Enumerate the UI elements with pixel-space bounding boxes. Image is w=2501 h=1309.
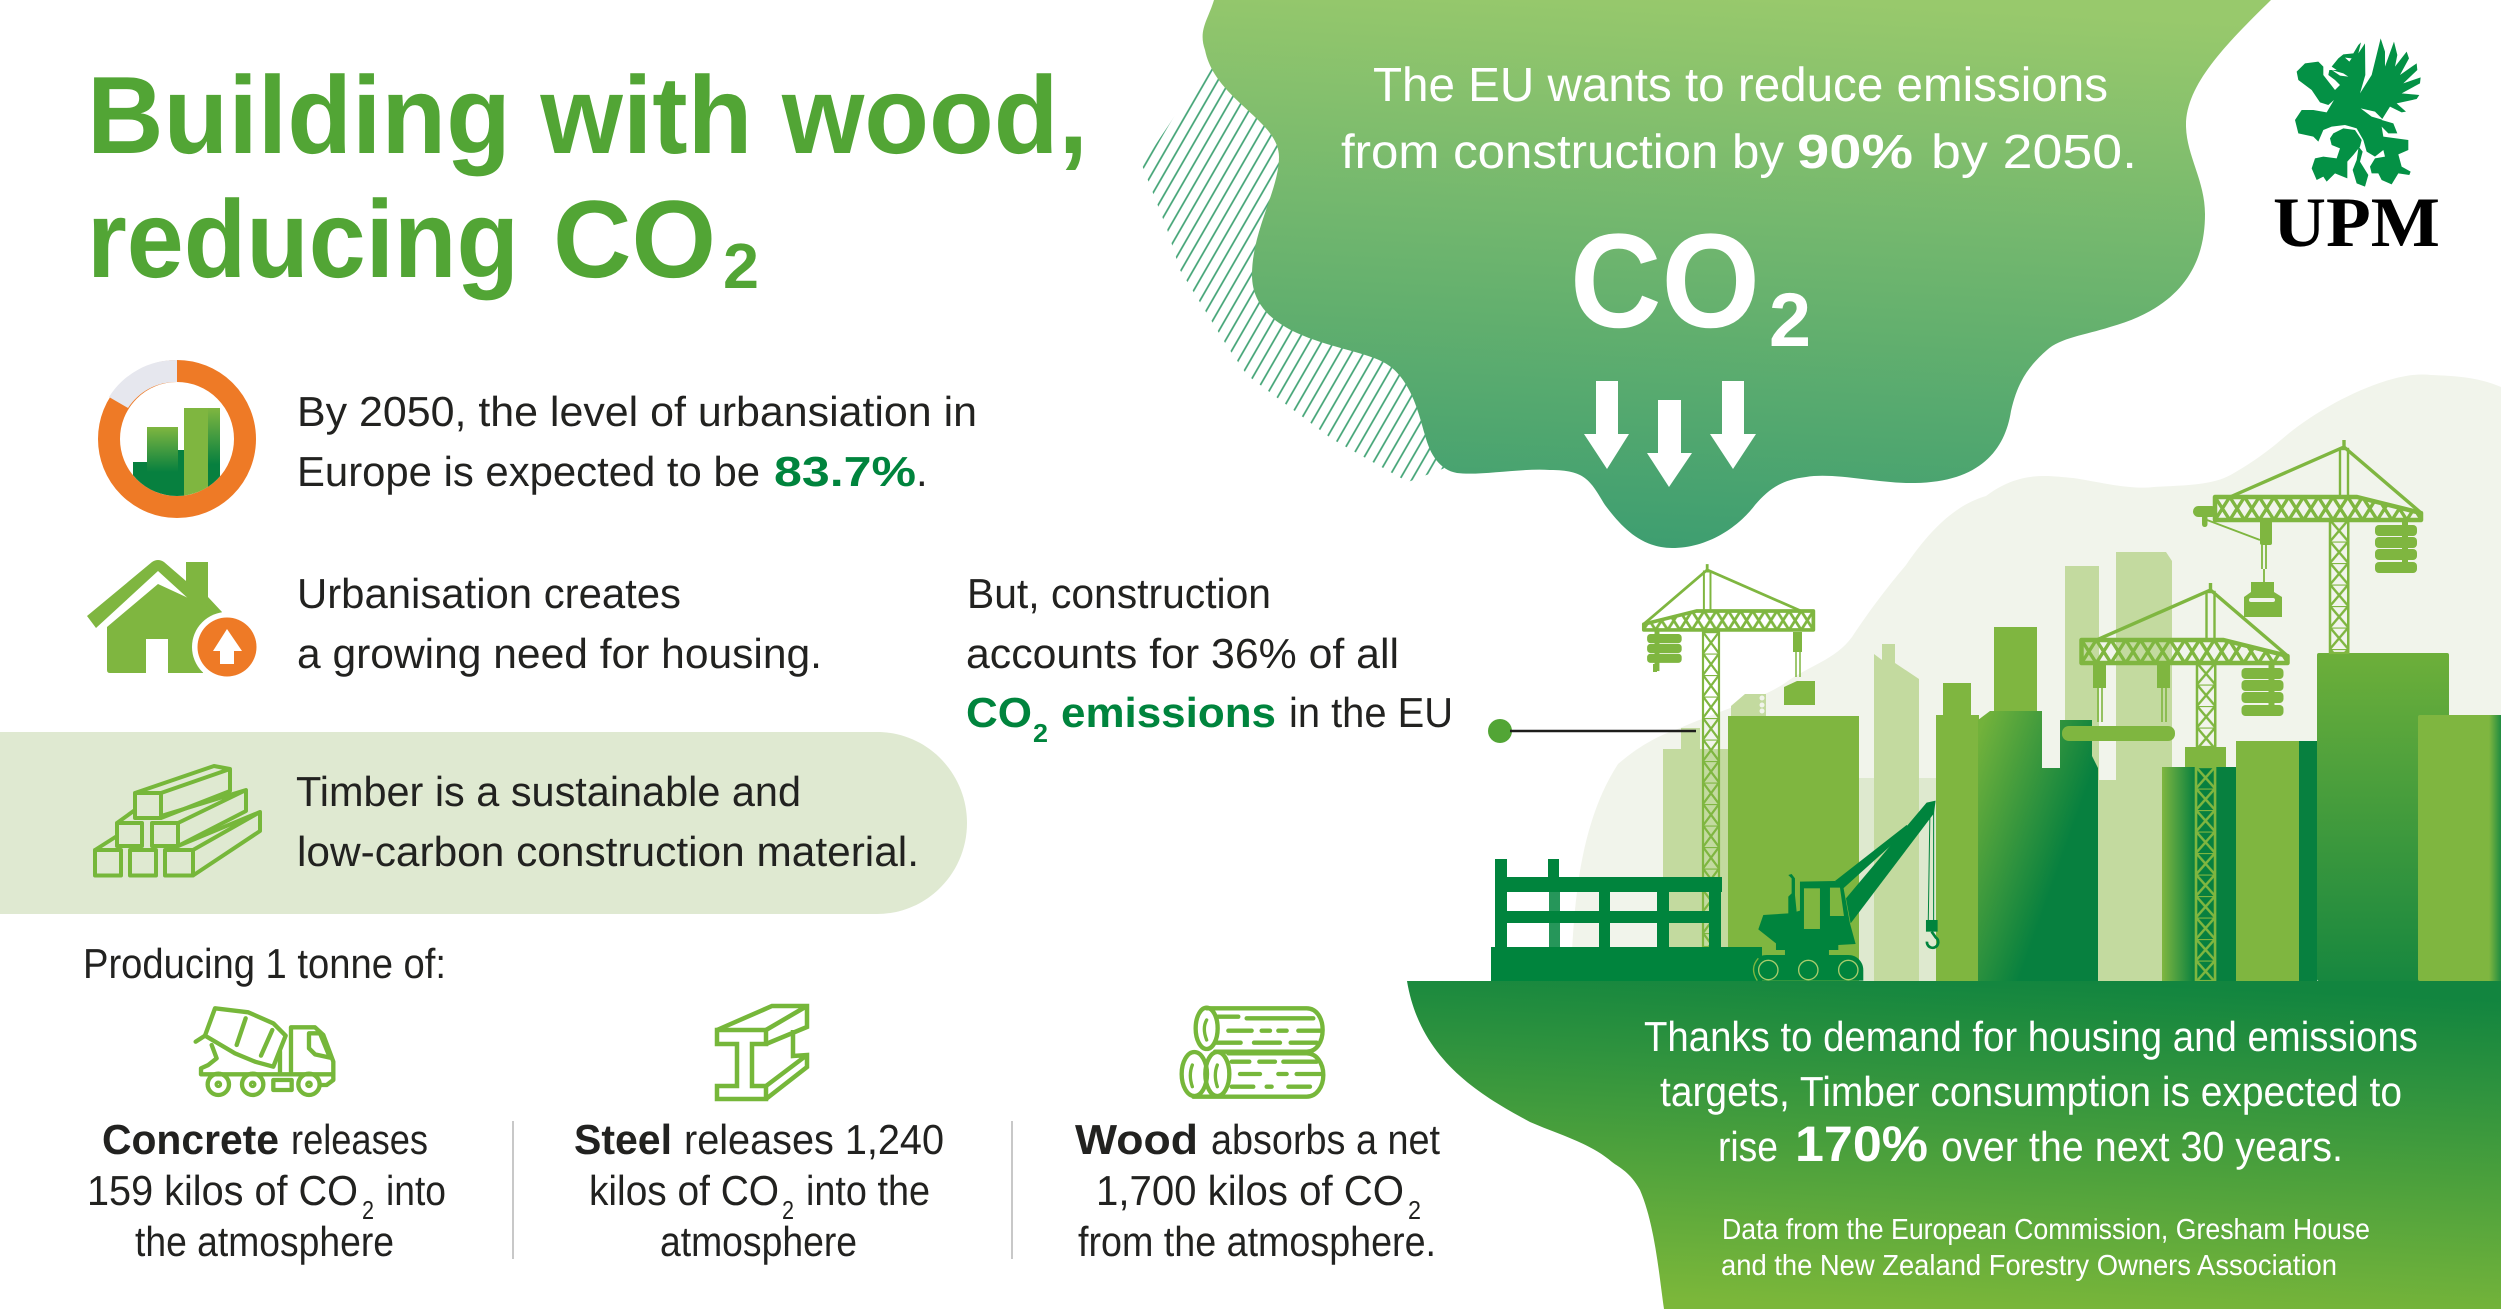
icon: stacked timber (95, 766, 260, 876)
city illustration (1491, 374, 2501, 981)
urbanisation text: By 2050, the level of urbansiation in (297, 388, 977, 435)
logo: UPM griffin: UPM (2273, 184, 2440, 262)
column: wood: 2 (1408, 1195, 1421, 1225)
column: concrete: Concrete (102, 1116, 279, 1163)
column: concrete: releases (291, 1116, 428, 1163)
column: steel: releases 1,240 (684, 1116, 944, 1163)
panel: timber consumption: Data from the European Commission, Gresham House (1722, 1214, 2370, 1246)
column: wood: absorbs a net (1211, 1116, 1440, 1163)
urbanisation text: 83.7% (774, 448, 916, 495)
title (87, 54, 1088, 302)
column: concrete: into (386, 1167, 446, 1214)
connector from text to city (1488, 719, 1696, 743)
construction share text (966, 570, 1453, 748)
title: CO (553, 178, 716, 301)
panel: timber: low-carbon construction material. (297, 828, 919, 875)
housing text (297, 570, 822, 677)
crawler crane (1752, 801, 1938, 981)
divider (512, 1121, 514, 1259)
construction share text: accounts for 36% of all (966, 630, 1399, 677)
panel: EU CO2 target cloud: CO (1570, 207, 1760, 356)
icon: concrete mixer truck (196, 1008, 333, 1095)
column: steel: atmosphere (660, 1218, 857, 1265)
panel: timber consumption: rise (1718, 1123, 1778, 1170)
column: steel: into the (806, 1167, 930, 1214)
construction share text: in the EU (1289, 689, 1453, 736)
icon: house with up arrow (87, 560, 262, 682)
panel: EU CO2 target cloud: by 2050. (1931, 126, 2137, 179)
column: wood: 1,700 kilos of CO (1096, 1167, 1404, 1214)
icon: wood logs (1182, 1008, 1323, 1097)
logo: UPM griffin (2273, 38, 2440, 262)
construction share text: 2 (1033, 718, 1048, 748)
panel: timber consumption: 170% (1795, 1116, 1928, 1172)
column: concrete: 159 kilos of CO (87, 1167, 358, 1214)
column: wood: from the atmosphere. (1078, 1218, 1436, 1265)
building frame under construction (1491, 859, 1762, 981)
divider (1011, 1121, 1013, 1259)
icon: steel beam (717, 1006, 807, 1099)
column: steel (574, 1006, 944, 1265)
column: concrete: 2 (362, 1195, 374, 1225)
background buildings (1663, 552, 2172, 981)
construction share text: But, construction (967, 570, 1271, 617)
column: concrete (87, 1008, 446, 1265)
panel: timber consumption: over the next 30 years. (1941, 1123, 2343, 1170)
construction share text: CO (966, 689, 1032, 736)
panel: EU CO2 target cloud (1203, 0, 2271, 548)
hatching behind CO2 cloud (1142, 60, 1470, 482)
icon: down arrows (1584, 381, 1756, 487)
panel: timber (0, 732, 967, 914)
crane 3 (2062, 583, 2288, 981)
panel: EU CO2 target cloud: 90% (1797, 126, 1913, 179)
construction share text: emissions (1061, 689, 1276, 736)
panel: EU CO2 target cloud: from construction by (1341, 126, 1784, 179)
urbanisation text: . (916, 448, 928, 495)
panel: EU CO2 target cloud: The EU wants to reduce emissions (1373, 59, 2108, 112)
column: steel: Steel (574, 1116, 672, 1163)
urbanisation text: Europe is expected to be (297, 448, 760, 495)
icon: urbanisation donut with bars (109, 360, 245, 507)
panel: timber consumption: Thanks to demand for housing and emissions (1644, 1013, 2418, 1060)
panel: timber consumption: and the New Zealand Forestry Owners Association (1721, 1250, 2337, 1282)
panel: timber: Timber is a sustainable and (296, 768, 801, 815)
pale background hill (1571, 374, 2501, 981)
title: Building with wood, (87, 54, 1088, 177)
housing text: a growing need for housing. (297, 630, 822, 677)
panel: timber consumption: targets, Timber consumption is expected to (1660, 1068, 2402, 1115)
column: wood: Wood (1075, 1116, 1198, 1163)
column: concrete: the atmosphere (135, 1218, 394, 1265)
crane 2 (2193, 440, 2421, 653)
crane 1 (1644, 564, 1815, 947)
urbanisation text (297, 388, 977, 495)
title: 2 (723, 230, 759, 302)
panel: EU CO2 target cloud: 2 (1769, 278, 1811, 363)
title: reducing (87, 178, 519, 301)
column: steel: 2 (782, 1195, 794, 1225)
column: steel: kilos of CO (589, 1167, 779, 1214)
panel: timber consumption (1407, 981, 2501, 1309)
housing text: Urbanisation creates (297, 570, 681, 617)
producing heading: Producing 1 tonne of: (83, 940, 446, 987)
mid-green and gradient buildings (1728, 716, 1859, 981)
column: wood (1075, 1008, 1440, 1265)
